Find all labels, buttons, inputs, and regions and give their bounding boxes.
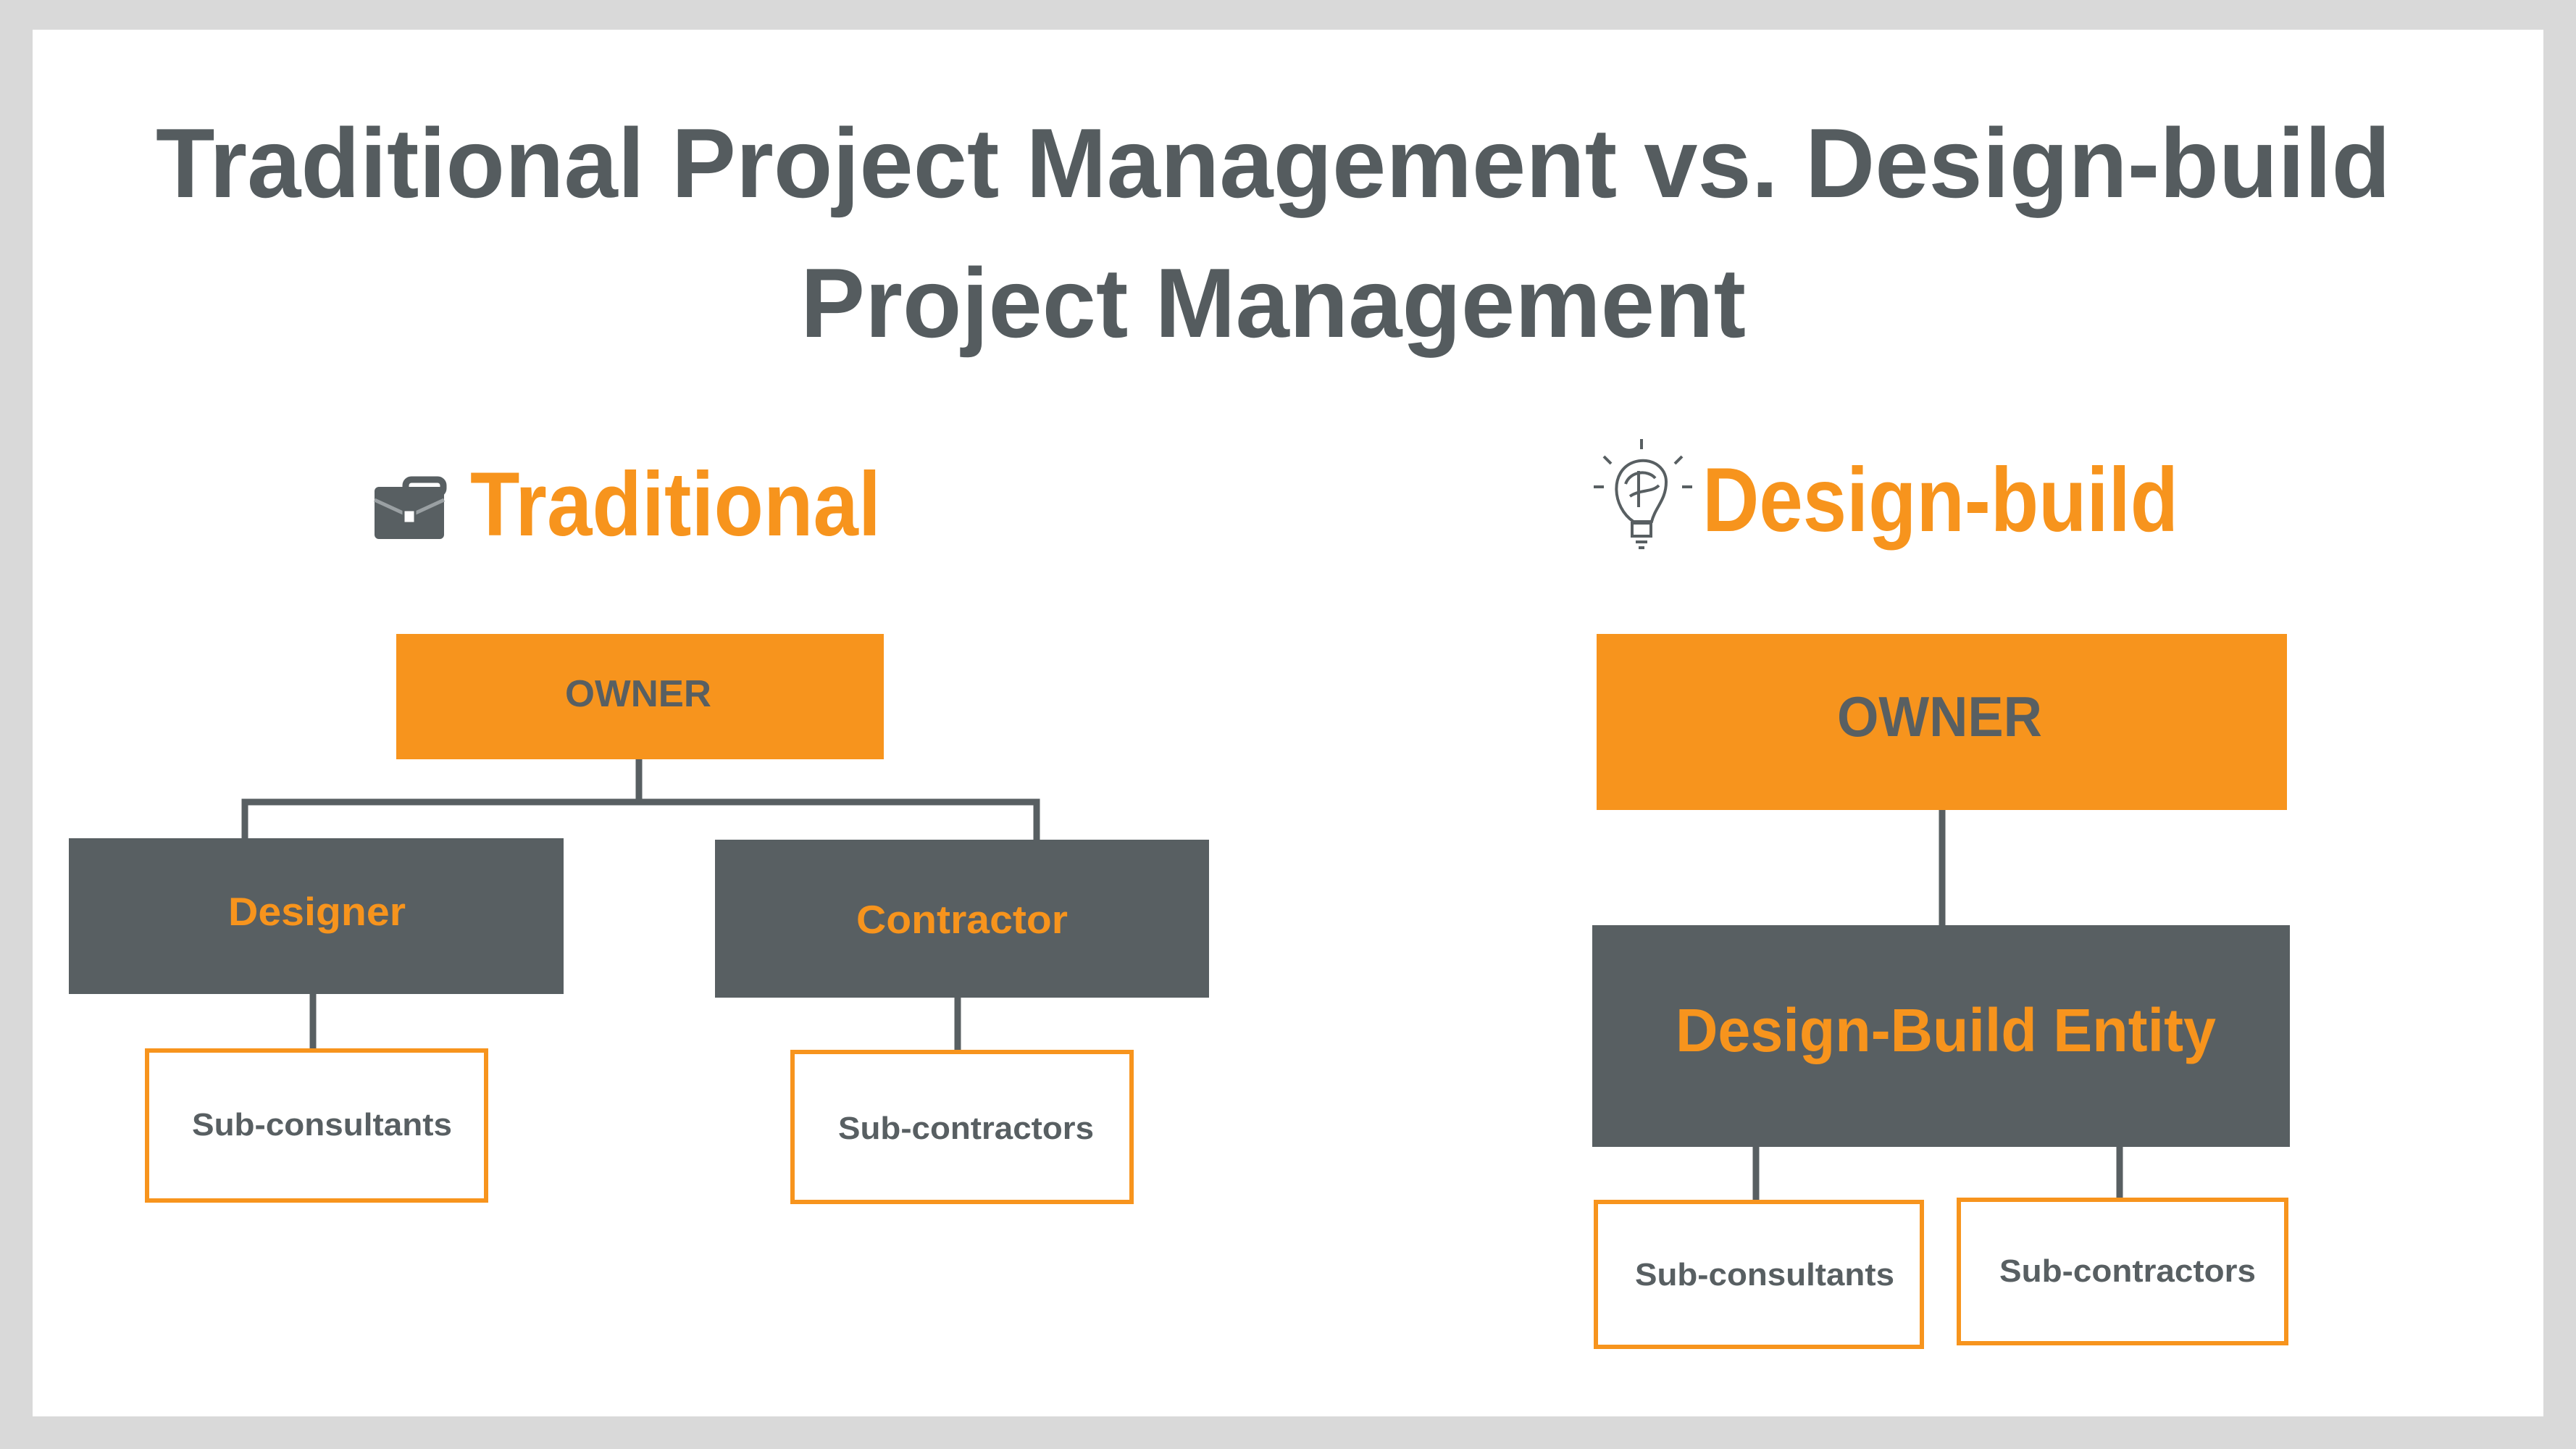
connectors bbox=[245, 759, 1037, 1050]
box: owner bbox=[396, 634, 884, 759]
box: sub-contractors bbox=[1959, 1200, 2286, 1343]
box: sub-consultants: Sub-consultants bbox=[1635, 1257, 1894, 1293]
box: owner: OWNER bbox=[565, 673, 711, 715]
connectors bbox=[1756, 810, 2120, 1200]
box: sub-consultants: Sub-consultants bbox=[192, 1107, 452, 1143]
box: sub-contractors: Sub-contractors bbox=[838, 1111, 1094, 1146]
icon: lightbulb with brain bbox=[1594, 439, 1692, 548]
chart: traditional org chart bbox=[69, 634, 1209, 1202]
title: Project Management bbox=[800, 248, 1746, 358]
box: owner bbox=[1597, 634, 2287, 810]
heading: Traditional: Traditional bbox=[470, 454, 881, 555]
box: sub-contractors bbox=[793, 1052, 1132, 1202]
box: designer bbox=[69, 838, 564, 994]
box: sub-consultants bbox=[1596, 1202, 1922, 1347]
box: design-build entity bbox=[1592, 925, 2290, 1147]
box: contractor bbox=[715, 840, 1209, 998]
box: designer: Designer bbox=[228, 889, 406, 934]
box: contractor: Contractor bbox=[856, 897, 1068, 942]
heading: Design-build bbox=[1594, 439, 2178, 551]
heading: Design-build: Design-build bbox=[1702, 450, 2178, 551]
title bbox=[156, 108, 2391, 358]
chart: design-build org chart bbox=[1592, 634, 2290, 1347]
box: design-build entity: Design-Build Entity bbox=[1676, 996, 2216, 1064]
box: sub-contractors: Sub-contractors bbox=[1999, 1253, 2256, 1289]
box: sub-consultants bbox=[147, 1051, 486, 1200]
box: owner: OWNER bbox=[1837, 685, 2042, 748]
title: Traditional Project Management vs. Design-build bbox=[156, 108, 2391, 218]
icon: briefcase bbox=[375, 480, 444, 539]
